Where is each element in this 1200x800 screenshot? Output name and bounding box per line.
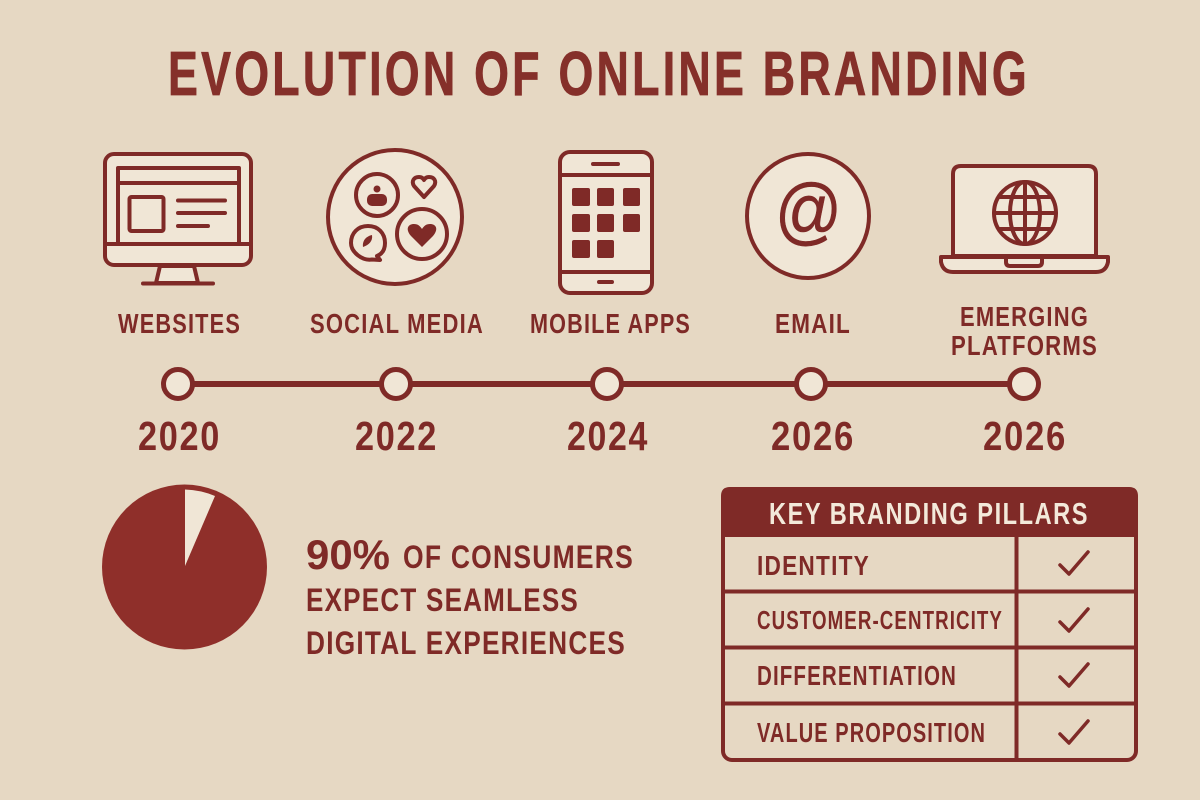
years: 2026 (771, 413, 855, 459)
table: key branding pillars: CUSTOMER-CENTRICITY (757, 605, 1003, 635)
icon: email at sign (747, 154, 869, 278)
statistic text: EXPECT SEAMLESS (306, 582, 579, 618)
statistic text: 90% (306, 531, 390, 578)
icon: email at sign: @ (775, 169, 842, 252)
years (138, 413, 1067, 459)
table header (721, 487, 1138, 537)
table: key branding pillars: VALUE PROPOSITION (757, 717, 986, 748)
check marks (1060, 552, 1088, 743)
labels: channels: PLATFORMS (951, 330, 1098, 361)
years: 2022 (355, 413, 438, 459)
years: 2024 (567, 413, 649, 459)
table: key branding pillars: IDENTITY (757, 550, 870, 581)
labels: channels: MOBILE APPS (530, 308, 691, 339)
labels: channels: EMAIL (775, 308, 851, 339)
icon: laptop with globe (941, 166, 1108, 272)
timeline (164, 370, 1038, 398)
statistic text: OF CONSUMERS (403, 539, 634, 575)
icon: desktop monitor (105, 154, 251, 284)
icon: mobile phone (560, 152, 652, 293)
statistic text: DIGITAL EXPERIENCES (306, 625, 626, 661)
years: 2026 (983, 413, 1067, 459)
table: key branding pillars (721, 487, 1138, 760)
years: 2020 (138, 413, 221, 459)
icon: social media circle (328, 150, 462, 284)
table: key branding pillars: DIFFERENTIATION (757, 660, 957, 691)
table: key branding pillars: KEY BRANDING PILLARS (769, 496, 1089, 531)
labels: channels: EMERGING (960, 301, 1089, 332)
labels: channels (118, 301, 1098, 361)
labels: channels: SOCIAL MEDIA (310, 308, 484, 339)
labels: channels: WEBSITES (118, 308, 241, 339)
pie chart: 90% (102, 484, 267, 650)
statistic text (306, 531, 634, 661)
